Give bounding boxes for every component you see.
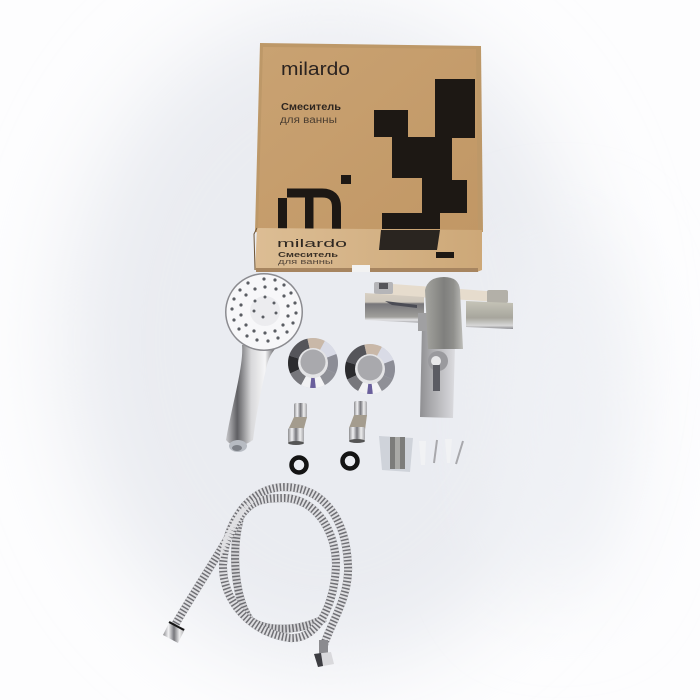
nozzles (230, 277, 298, 343)
wall plugs and screws (419, 439, 463, 465)
wall holder (379, 436, 413, 472)
box pattern (374, 79, 475, 229)
lever (428, 351, 448, 391)
left connector nut (374, 282, 393, 294)
box lid (258, 47, 478, 232)
spray face (225, 273, 303, 351)
flap title: Смеситель (278, 250, 339, 259)
rubber gasket left (292, 458, 306, 472)
box side strips (255, 43, 483, 232)
handle tip (229, 440, 247, 452)
screw 1 (434, 440, 437, 463)
inner hose strand (235, 505, 325, 629)
right body (466, 301, 513, 329)
plug 1 (419, 441, 426, 465)
flap mark (436, 252, 454, 258)
flap pattern (379, 230, 440, 250)
hose end fitting left (163, 621, 185, 643)
lower plate (420, 325, 455, 418)
emblem dot (341, 175, 351, 184)
screw 2 (456, 441, 463, 464)
box bottom edge (256, 268, 478, 272)
flap subtitle: для ванны (278, 259, 333, 266)
bath mixer (365, 277, 513, 418)
eccentric adapter right (349, 401, 367, 443)
flap logo: milardo (277, 238, 347, 250)
left body slit (385, 301, 417, 308)
cream reflection (380, 283, 500, 302)
flexible hose (163, 487, 348, 667)
m emblem (278, 175, 351, 229)
handle (226, 342, 282, 446)
shower head (225, 273, 303, 452)
rubber gasket right (342, 454, 358, 468)
product subtitle: для ванны (280, 115, 337, 126)
escutcheon left (287, 337, 339, 389)
brand logo: milardo (281, 59, 350, 79)
plug 2 (445, 439, 452, 463)
white tag (352, 265, 370, 272)
box flap (254, 228, 482, 272)
hose main strand (175, 487, 348, 650)
cardboard box (254, 43, 483, 272)
escutcheon right (344, 343, 396, 395)
right connector nut (487, 290, 508, 303)
hose end fitting right (314, 640, 334, 667)
eccentric adapter left (288, 403, 307, 445)
left body (365, 293, 424, 323)
product title: Смеситель (281, 102, 341, 113)
spout (425, 277, 463, 349)
valve joint (418, 313, 428, 331)
